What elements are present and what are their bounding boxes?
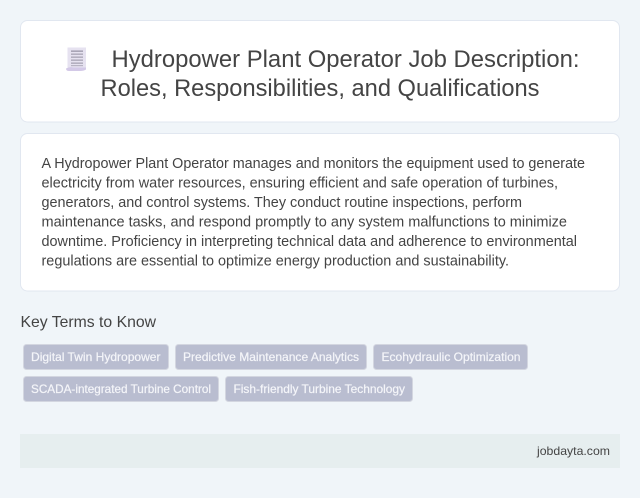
title — [100, 46, 580, 102]
tag: Predictive Maintenance Analytics — [176, 344, 366, 370]
tag: SCADA-integrated Turbine Control: SCADA-integrated Turbine Control — [31, 382, 211, 396]
description text: downtime. Proficiency in interpreting technical data and adherence to environmental — [42, 234, 577, 250]
title: Roles, Responsibilities, and Qualifications — [100, 75, 540, 102]
tag: SCADA-integrated Turbine Control — [24, 376, 218, 402]
footer bar — [20, 434, 620, 468]
tag: Fish-friendly Turbine Technology — [226, 376, 412, 402]
tag: Digital Twin Hydropower: Digital Twin Hydropower — [31, 350, 160, 364]
title: Hydropower Plant Operator Job Description: — [112, 46, 580, 73]
description text: electricity from water resources, ensuring efficient and safe operation of turbines, — [42, 176, 558, 192]
description text: regulations are essential to optimize energy production and sustainability. — [42, 254, 509, 270]
tag: Fish-friendly Turbine Technology: Fish-friendly Turbine Technology — [234, 382, 405, 396]
tag: Ecohydraulic Optimization: Ecohydraulic Optimization — [382, 350, 520, 364]
panel: description card — [20, 134, 620, 291]
tag: Predictive Maintenance Analytics: Predictive Maintenance Analytics — [183, 350, 359, 364]
tag: Digital Twin Hydropower — [24, 344, 168, 370]
panel: title card — [20, 20, 620, 122]
description text: A Hydropower Plant Operator manages and monitors the equipment used to generate — [42, 156, 585, 172]
description text: generators, and control systems. They conduct routine inspections, perform — [42, 195, 522, 211]
tag: Ecohydraulic Optimization — [374, 344, 528, 370]
heading: key terms: Key Terms to Know — [20, 314, 156, 331]
footer source text: jobdayta.com — [536, 444, 610, 458]
description text: maintenance tasks, and respond promptly to any system malfunctions to minimize — [42, 214, 567, 230]
icon: document scroll — [66, 48, 86, 71]
description text — [42, 156, 585, 270]
